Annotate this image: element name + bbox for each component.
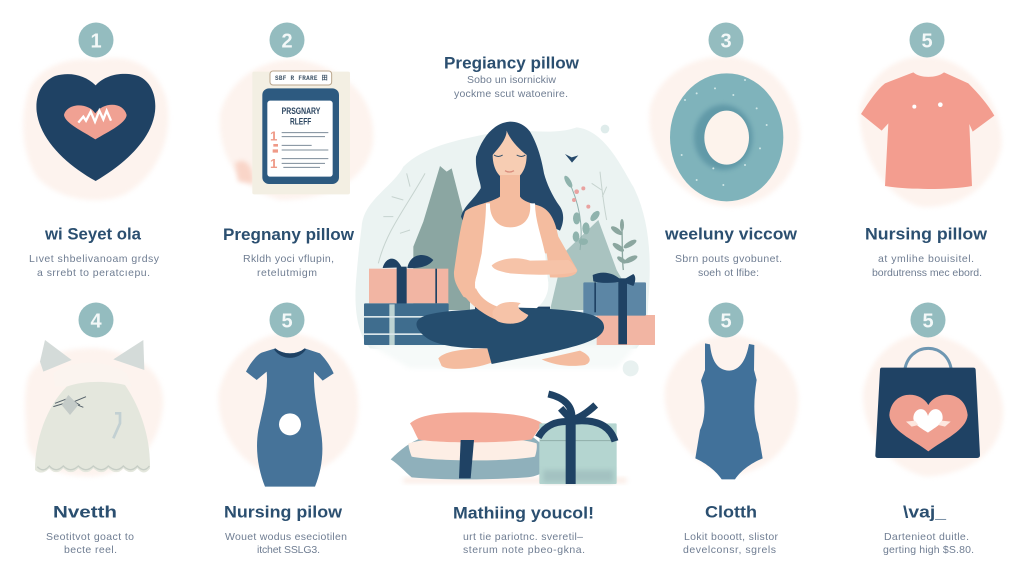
heading: Clotth [705, 504, 757, 522]
description line 1: at ymlihe bouisitel. [878, 253, 974, 265]
panel 5: baby dress [25, 302, 163, 556]
description line 2: retelutmigm [257, 267, 317, 279]
icon: stacked pillows and gift box [391, 394, 627, 484]
heading: wi Seyet ola [44, 226, 142, 244]
badge 5 [910, 302, 946, 338]
description line 2: sterum note pbeo-gkna. [463, 544, 585, 556]
badge 5: 5 [281, 310, 293, 332]
badge 4 [78, 302, 114, 338]
description line 1: Wouet wodus eseciotilen [225, 531, 347, 543]
heading: Nursing pilow [224, 504, 342, 522]
badge 5: 5 [921, 30, 933, 52]
description line 2: a srrebt to peratcıepu. [37, 267, 150, 279]
description line 1: Lokit booott, slistor [684, 531, 778, 543]
icon: lace dress [25, 340, 163, 477]
icon: pregnancy relief card: 1 [270, 156, 278, 171]
icon: pregnancy relief card: RLEFF [290, 117, 312, 127]
panel 4: t-shirt [860, 22, 1002, 279]
description line 1: Lıvet shbelivanoam grdsy [29, 253, 160, 265]
icon: pregnancy relief card: 1 [270, 129, 278, 144]
icon: tote bag with heart [863, 333, 1003, 477]
center top text block [444, 54, 579, 100]
center illustration: pregnant woman with gifts [355, 122, 655, 376]
badge 1 [78, 22, 114, 58]
badge 5 [910, 22, 944, 58]
badge 5: 5 [720, 310, 732, 332]
badge 5 [708, 302, 744, 338]
badge 2 [270, 22, 304, 58]
description line 2: itchet SSLG3. [257, 544, 320, 556]
description line 1: Sbrn pouts gvobunet. [675, 253, 782, 265]
badge 1: 1 [90, 30, 102, 52]
heading: Nvetth [53, 504, 117, 522]
description line 2: develconsr, sgrels [683, 544, 776, 556]
icon: blue bodysuit [665, 335, 798, 479]
description line 1: urt tie pariotnc. sveretil– [463, 531, 583, 543]
panel 6: maternity dress [218, 302, 358, 556]
icon: pink t-shirt [860, 56, 1002, 207]
description line 2: gerting high $S.80. [883, 544, 974, 556]
description line 1: Seotitvot goact to [46, 531, 134, 543]
heading: Nursing pillow [865, 226, 987, 244]
badge 4: 4 [90, 310, 102, 332]
icon: donut pillow [649, 56, 800, 207]
description line 2: becte reel. [64, 544, 117, 556]
panel 8: swimsuit [665, 302, 798, 556]
icon: blue dress [218, 333, 358, 487]
icon: heart [23, 58, 168, 200]
heading: \vaj_ [903, 504, 947, 522]
woman figure [416, 122, 604, 369]
panel 2: clipboard [220, 22, 373, 279]
heading: Mathiing youcol! [453, 504, 594, 522]
center top heading: Pregiancy pillow [444, 54, 579, 72]
description line 2: bordutrenss mec ebord. [872, 267, 982, 279]
panel 7: pillows and gift [391, 394, 627, 556]
badge 3: 3 [720, 30, 732, 52]
icon: pregnancy relief card: PRSGNARY [282, 106, 320, 116]
center top body line 1: Sobo un isornickiw [467, 74, 556, 86]
icon: pregnancy relief card: SBF R FRARE 田 [275, 75, 328, 82]
badge 2: 2 [281, 30, 293, 52]
panel 3: donut pillow [649, 22, 800, 279]
description line 2: soeh ot lfibe: [698, 267, 759, 279]
description line 1: Dartenieot duitle. [884, 531, 969, 543]
icon: pregnancy relief card [220, 60, 373, 200]
description line 1: Rkldh yoci vflupin, [243, 253, 334, 265]
heading: Pregnany pillow [223, 226, 354, 244]
badge 3 [708, 22, 744, 58]
panel 1: heart [23, 22, 168, 279]
heading: weeluny viccow [664, 226, 797, 244]
badge 5 [270, 302, 304, 338]
badge 5: 5 [922, 310, 934, 332]
panel 9: tote bag [863, 302, 1003, 556]
center top body line 2: yockme scut watoenire. [454, 88, 568, 100]
